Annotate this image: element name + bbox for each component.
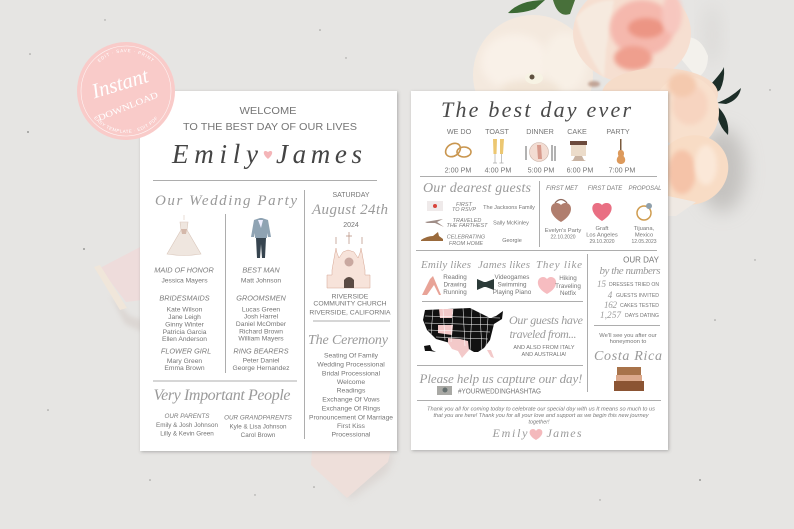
caption: italy and australia: AND AUSTRALIA! xyxy=(522,352,567,358)
heading: the ceremony: The Ceremony xyxy=(308,333,389,348)
hashtag: #YOURWEDDINGHASHTAG xyxy=(458,388,541,396)
ceremony list xyxy=(309,352,393,438)
our day by the numbers: GUESTS INVITED xyxy=(616,293,659,299)
schedule labels: WE DO xyxy=(447,127,472,136)
milestones details: 22.10.2020 xyxy=(550,234,576,240)
thank you note: together! xyxy=(529,420,550,426)
icon: pink heart xyxy=(538,277,556,294)
grandparents xyxy=(224,414,293,439)
guest rows: FROM HOME xyxy=(449,241,483,247)
likes lists xyxy=(443,274,581,297)
guest rows: THE FARTHEST xyxy=(446,223,488,229)
guest rows: TRAVELED xyxy=(453,218,481,224)
likes lists: Playing Piano xyxy=(493,289,532,296)
our day by the numbers: 1,257 xyxy=(600,310,622,320)
milestones details: 29.10.2020 xyxy=(589,239,615,245)
venue: COMMUNITY CHURCH xyxy=(313,300,387,308)
icon: groom suit xyxy=(251,218,271,258)
pink ribbon left xyxy=(94,246,142,332)
column: maid of honor and bridesmaids: Jessica Mayers xyxy=(161,278,208,284)
ceremony list: Exchange Of Rings xyxy=(322,406,381,412)
heading: our dearest guests: Our dearest guests xyxy=(423,181,532,196)
column: best man and groomsmen: Peter Daniel xyxy=(243,358,280,364)
ceremony list: Exchange Of Vows xyxy=(322,396,380,404)
our day by the numbers: 162 xyxy=(604,300,618,310)
venue: RIVERSIDE xyxy=(332,294,369,300)
couple names: James xyxy=(276,139,362,169)
our day by the numbers: 4 xyxy=(608,290,613,300)
icon: heart lock xyxy=(551,200,571,222)
our day by the numbers: CAKES TESTED xyxy=(620,303,659,309)
thank you note: Thank you all for coming today to celebrate our special day with us It means so much to us xyxy=(427,406,655,412)
schedule times: 5:00 PM xyxy=(528,166,554,174)
icon: wedding rings xyxy=(443,140,471,160)
heading: capture our day: Please help us capture our day! xyxy=(418,371,582,386)
milestones details xyxy=(545,226,657,245)
icon: dog xyxy=(421,232,443,241)
grandparents: OUR GRANDPARENTS xyxy=(224,414,293,422)
parents xyxy=(156,413,218,438)
our day by the numbers: OUR DAY xyxy=(623,256,660,264)
date block: SATURDAY xyxy=(332,192,370,199)
heading: likes: Emily likes xyxy=(420,259,471,271)
badge: instant download xyxy=(77,42,175,140)
icon: church xyxy=(327,232,370,288)
icon: guitar xyxy=(617,139,625,164)
column: best man and groomsmen: GROOMSMEN xyxy=(236,294,286,302)
column: best man and groomsmen: George Hernandez xyxy=(233,365,290,372)
ceremony list: Seating Of Family xyxy=(324,352,379,360)
ceremony list: Bridal Processional xyxy=(322,370,381,378)
guest rows: TO RSVP xyxy=(452,207,476,213)
thank you note: that you are here! Thank you for all your love and support as we begin this new journey xyxy=(434,413,649,419)
parents: OUR PARENTS xyxy=(164,413,210,420)
icon: airplane xyxy=(425,219,444,227)
column: best man and groomsmen: Richard Brown xyxy=(239,328,283,336)
heading: guests traveled xyxy=(509,313,584,341)
our day by the numbers: 15 xyxy=(597,279,606,289)
milestones details: Evelyn's Party xyxy=(545,228,581,234)
schedule times: 6:00 PM xyxy=(567,166,593,174)
signature xyxy=(492,426,582,440)
icon: engagement ring xyxy=(637,203,652,220)
milestones details: 12.05.2023 xyxy=(631,239,657,245)
our day by the numbers xyxy=(597,256,660,320)
badge: instant download: EDIT · SAVE · PRINT xyxy=(98,48,154,62)
couple names: Emily xyxy=(171,139,258,169)
icon: camera xyxy=(437,386,452,395)
honeymoon note: honeymoon to xyxy=(610,339,646,345)
column: best man and groomsmen: BEST MAN xyxy=(242,266,280,274)
icon: heels xyxy=(422,276,441,295)
likes lists: Drawing xyxy=(443,282,467,288)
guest rows: Georgie xyxy=(502,238,522,244)
heading: likes: James likes xyxy=(478,259,530,271)
schedule labels: DINNER xyxy=(526,127,554,136)
heading: costa rica: Costa Rica xyxy=(594,349,662,364)
column: maid of honor and bridesmaids: Ellen Anderson xyxy=(162,336,207,343)
guest rows: CELEBRATING xyxy=(447,234,486,240)
column: best man and groomsmen: Daniel McOmber xyxy=(236,321,287,328)
likes lists: Running xyxy=(443,289,467,296)
schedule times xyxy=(445,166,635,174)
likes lists: Videogames xyxy=(495,274,529,281)
peach roses xyxy=(602,68,741,218)
milestones headings: FIRST DATE xyxy=(588,186,623,192)
heading: guests traveled: Our guests have xyxy=(509,313,584,327)
signature: Emily xyxy=(492,426,528,440)
ceremony list: Pronouncement Of Marriage xyxy=(309,414,393,422)
badge: instant download: EASY TEMPLATE · EDIT PDF xyxy=(94,116,157,133)
likes lists: Reading xyxy=(443,274,467,281)
column: maid of honor and bridesmaids: Mary Green xyxy=(167,358,202,365)
venue: RIVERSIDE, CALIFORNIA xyxy=(309,310,391,316)
likes lists: Traveling xyxy=(555,283,581,290)
guest rows: FIRST xyxy=(456,202,473,208)
caption: italy and australia xyxy=(513,345,575,358)
icon: flower heart xyxy=(592,203,612,221)
our day by the numbers: DAYS DATING xyxy=(625,313,659,319)
ceremony list: Wedding Processional xyxy=(317,362,385,368)
column: best man and groomsmen xyxy=(233,266,290,372)
leaves xyxy=(508,0,741,136)
heading: our wedding party: Our Wedding Party xyxy=(155,193,297,209)
date block: 2024 xyxy=(343,222,359,229)
column: maid of honor and bridesmaids: FLOWER GIRL xyxy=(161,346,211,356)
column: maid of honor and bridesmaids: Ginny Winter xyxy=(165,322,205,328)
schedule times: 4:00 PM xyxy=(485,166,511,174)
grandparents: Kyle & Lisa Johnson xyxy=(229,424,287,430)
column: best man and groomsmen: RING BEARERS xyxy=(233,346,289,356)
column: best man and groomsmen: Lucas Green xyxy=(242,306,280,314)
heading: likes: They like xyxy=(536,259,582,271)
guest rows: The Jacksons Family xyxy=(483,205,535,211)
title: welcome xyxy=(183,106,357,133)
icon: champagne glasses xyxy=(493,139,504,163)
title: welcome: WELCOME xyxy=(240,106,297,117)
schedule times: 7:00 PM xyxy=(609,166,635,174)
caption: italy and australia: AND ALSO FROM ITALY xyxy=(513,345,575,351)
column: maid of honor and bridesmaids: Jane Leigh xyxy=(168,314,201,321)
date block xyxy=(311,192,388,229)
likes lists: Netfix xyxy=(560,290,577,297)
badge: instant download: Instant xyxy=(88,63,152,104)
milestones headings: FIRST MET xyxy=(546,186,579,192)
couple names xyxy=(171,139,362,169)
guest rows: Sally McKinley xyxy=(493,220,529,226)
heading: guests traveled: traveled from... xyxy=(510,327,576,341)
milestones details: Los Angeles xyxy=(586,232,618,238)
schedule times: 2:00 PM xyxy=(445,166,471,174)
icon: suitcases xyxy=(614,367,644,391)
honeymoon note: We'll see you after our xyxy=(599,333,657,339)
icon: cake xyxy=(570,141,587,161)
column: best man and groomsmen: Matt Johnson xyxy=(241,278,281,284)
ceremony list: Readings xyxy=(337,388,366,394)
thank you note xyxy=(427,406,655,426)
map: USA xyxy=(423,308,503,358)
badge: instant download: DOWNLOAD xyxy=(96,89,160,123)
schedule labels: PARTY xyxy=(606,127,630,136)
coral peony xyxy=(573,0,708,87)
column: best man and groomsmen: Josh Harrel xyxy=(244,314,279,320)
ceremony list: First Kiss xyxy=(337,423,366,430)
schedule labels: TOAST xyxy=(485,127,510,136)
likes lists: Hiking xyxy=(559,275,577,282)
icon: wedding dress xyxy=(167,215,201,256)
column: maid of honor and bridesmaids xyxy=(154,266,214,372)
icon: bow tie xyxy=(477,279,494,290)
schedule labels xyxy=(447,127,630,136)
heading: very important people: Very Important People xyxy=(154,387,290,404)
milestones details: Tijuana, xyxy=(634,226,655,232)
parents: Lilly & Kevin Green xyxy=(160,430,214,438)
white ranunculus xyxy=(473,15,593,135)
heading: likes xyxy=(420,259,582,271)
title: the best day ever: The best day ever xyxy=(441,97,631,122)
date block: August 24th xyxy=(311,202,388,218)
our day by the numbers: by the numbers xyxy=(600,265,660,277)
likes lists: Swimming xyxy=(497,282,527,288)
icon: dinner plate xyxy=(526,142,555,162)
pink silk bottom xyxy=(311,450,395,500)
parents: Emily & Josh Johnson xyxy=(156,422,218,429)
column: maid of honor and bridesmaids: MAID OF HONOR xyxy=(154,266,214,274)
honeymoon note xyxy=(599,333,657,345)
milestones headings: PROPOSAL xyxy=(628,186,662,192)
milestones headings xyxy=(546,186,662,192)
guest rows xyxy=(446,202,535,247)
grandparents: Carol Brown xyxy=(241,432,276,439)
icon: envelope xyxy=(427,201,443,211)
signature: James xyxy=(546,426,582,440)
flowers bouquet xyxy=(473,0,746,218)
column: maid of honor and bridesmaids: Kate Wilson xyxy=(167,306,203,314)
column: maid of honor and bridesmaids: Emma Brown xyxy=(164,365,205,372)
right card xyxy=(411,91,668,450)
milestones details: Graft xyxy=(596,226,609,232)
column: maid of honor and bridesmaids: BRIDESMAIDS xyxy=(159,294,210,302)
ceremony list: Processional xyxy=(332,432,371,438)
schedule labels: CAKE xyxy=(567,127,587,136)
title: welcome: TO THE BEST DAY OF OUR LIVES xyxy=(183,122,357,133)
column: best man and groomsmen: William Mayers xyxy=(238,336,284,342)
ceremony list: Welcome xyxy=(337,379,365,386)
milestones details: Mexico xyxy=(635,232,653,238)
column: maid of honor and bridesmaids: Patricia Garcia xyxy=(163,329,207,336)
our day by the numbers: DRESSES TRIED ON xyxy=(609,282,659,288)
venue xyxy=(309,294,391,316)
left card xyxy=(140,91,397,451)
